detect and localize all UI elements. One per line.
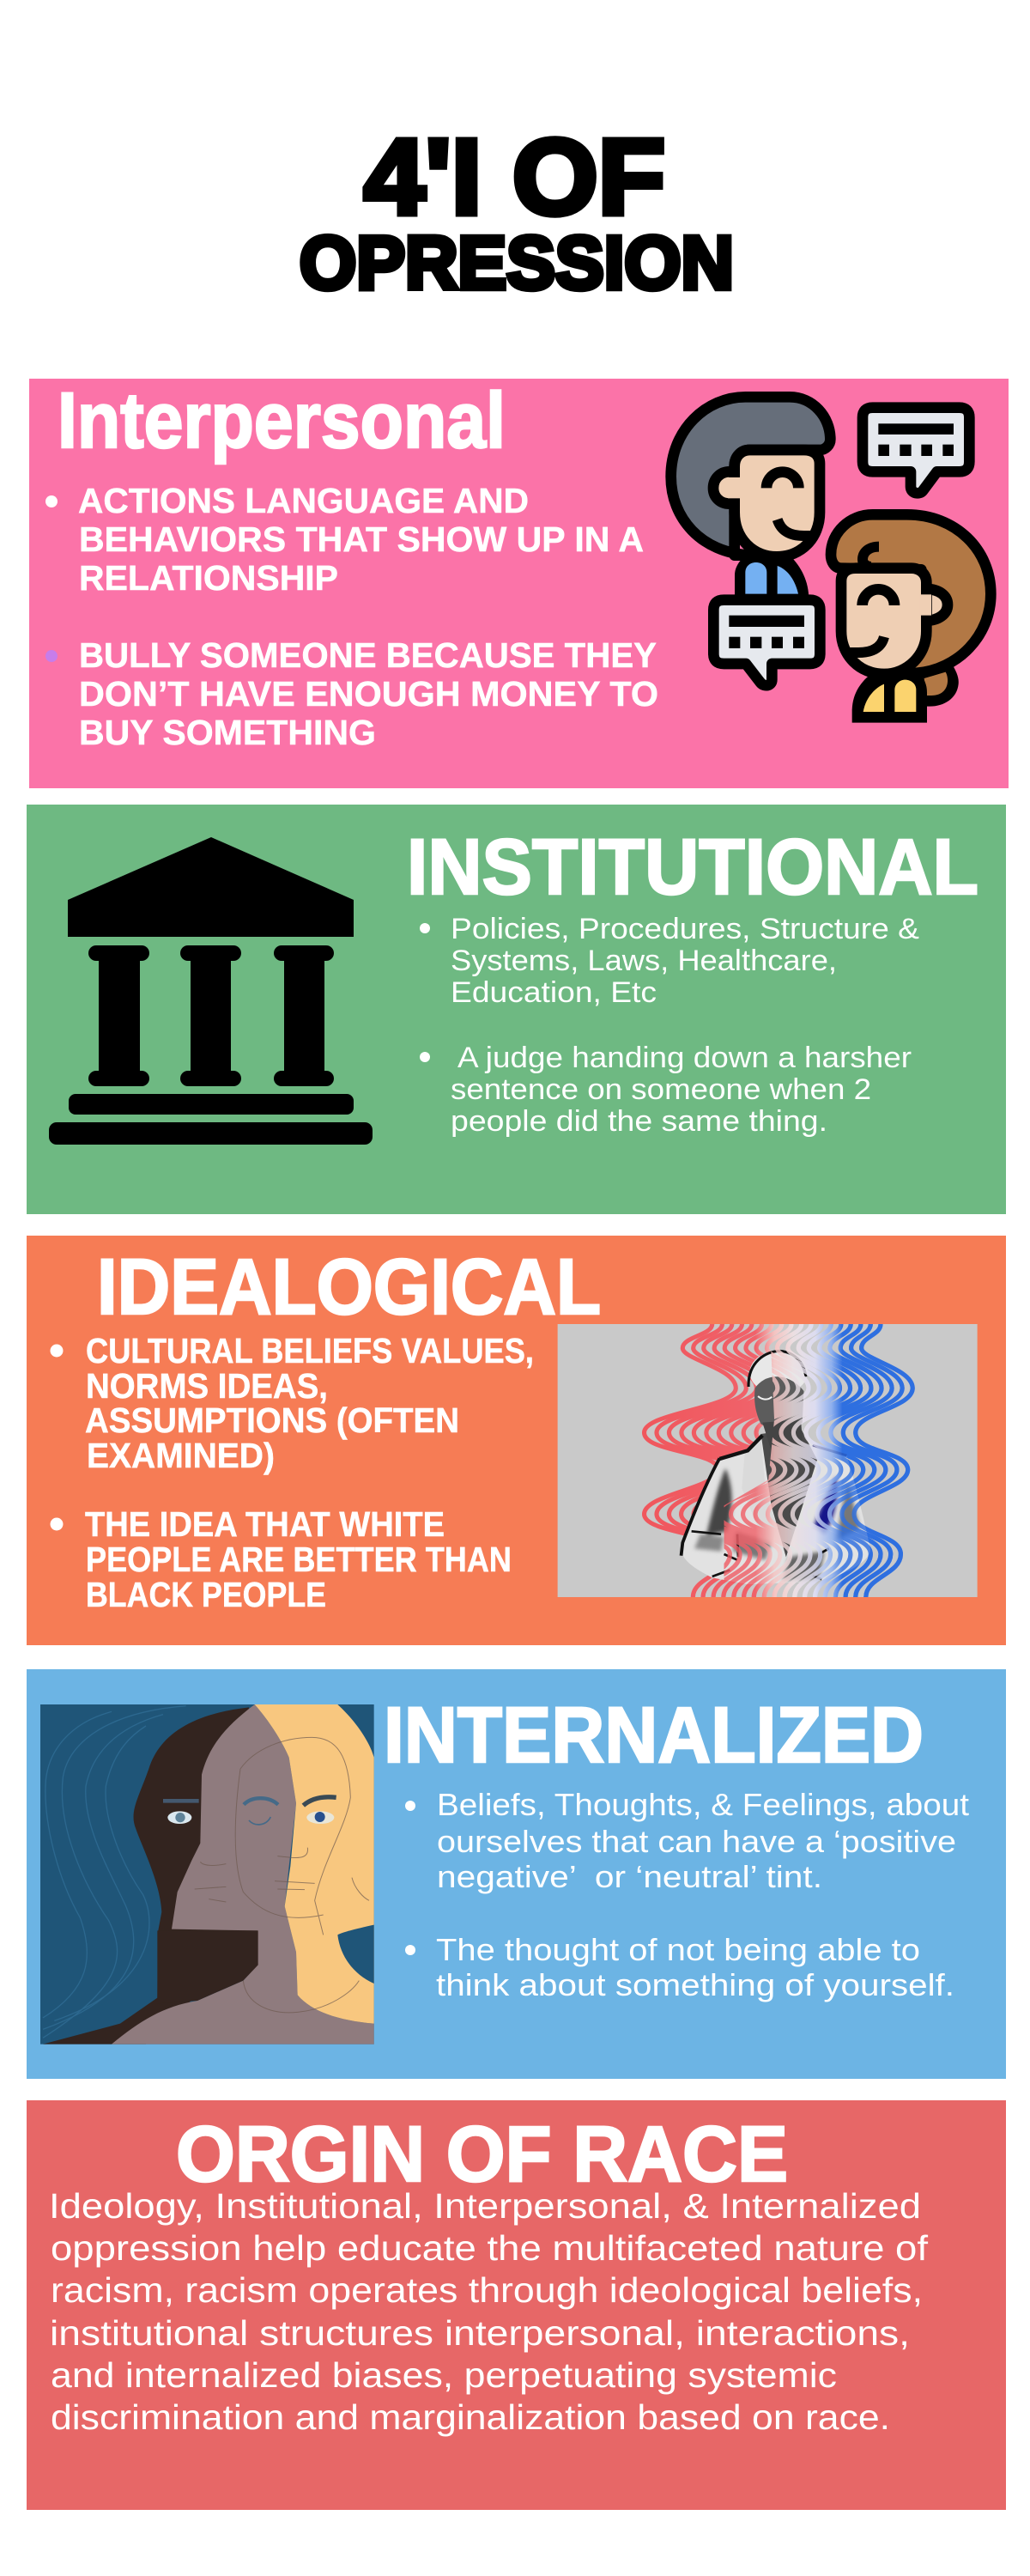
body paragraph: institutional structures interpersonal, interactions,	[50, 2313, 910, 2353]
panel: orgin of race	[27, 2100, 1006, 2510]
bullet list: institutional: Policies, Procedures, Structure &	[451, 913, 919, 945]
panel: internalized	[27, 1669, 1006, 2079]
body paragraph: discrimination and marginalization based on race.	[51, 2397, 890, 2437]
heading: idealogical: IDEALOGICAL	[97, 1243, 601, 1331]
title: OPRESSION	[300, 222, 734, 305]
bullet list: interpersonal: BEHAVIORS THAT SHOW UP IN A	[79, 519, 644, 559]
bullet list: institutional: sentence on someone when 2	[451, 1073, 871, 1106]
icon: institution building	[49, 837, 373, 1145]
illustration: three-tone face	[40, 1704, 374, 2044]
bullet list: institutional: A judge handing down a harsher	[457, 1042, 912, 1074]
title	[300, 118, 734, 305]
heading: internalized: INTERNALIZED	[384, 1692, 924, 1779]
bullet list: idealogical	[50, 1331, 534, 1614]
bullet list: internalized	[405, 1787, 969, 2002]
bullet list: internalized: think about something of yourself.	[436, 1967, 954, 2002]
bullet list: institutional	[420, 913, 919, 1138]
icon: speech bubble top right	[863, 408, 969, 493]
body paragraph	[49, 2186, 929, 2437]
panel: idealogical	[27, 1236, 1006, 1645]
bullet list: idealogical: EXAMINED)	[87, 1436, 275, 1475]
bullet list: interpersonal: RELATIONSHIP	[79, 558, 338, 598]
bullet list: institutional: people did the same thing.	[451, 1105, 827, 1138]
icon: man with grey hair	[671, 397, 830, 599]
body paragraph: oppression help educate the multifaceted nature of	[51, 2228, 929, 2268]
bullet list: idealogical: PEOPLE ARE BETTER THAN	[86, 1540, 512, 1579]
bullet list: internalized: Beliefs, Thoughts, & Feelings, about	[437, 1787, 969, 1822]
icon: woman with brown hair	[831, 514, 991, 723]
icon: two people talking	[671, 397, 991, 723]
bullet list: internalized: ourselves that can have a ‘positive	[437, 1824, 956, 1859]
bullet list: idealogical: CULTURAL BELIEFS VALUES,	[86, 1331, 534, 1370]
heading: orgin of race: ORGIN OF RACE	[176, 2111, 788, 2198]
bullet list: idealogical: NORMS IDEAS,	[86, 1366, 328, 1406]
bullet list: interpersonal: BULLY SOMEONE BECAUSE THEY	[79, 635, 657, 675]
heading: interpersonal: Interpersonal	[58, 377, 506, 465]
heading: institutional: INSTITUTIONAL	[407, 823, 978, 911]
bullet list: internalized: The thought of not being able to	[436, 1932, 920, 1967]
figure: woman in blazer	[682, 1351, 870, 1584]
bullet list: interpersonal	[45, 481, 658, 752]
body paragraph: and internalized biases, perpetuating systemic	[51, 2355, 837, 2395]
illustration: woman with red and blue waves	[558, 1324, 978, 1597]
bullet list: interpersonal: BUY SOMETHING	[79, 713, 376, 752]
bullet list: institutional: Education, Etc	[451, 976, 657, 1009]
bullet list: idealogical: ASSUMPTIONS (OFTEN	[85, 1400, 459, 1440]
bullet list: institutional: Systems, Laws, Healthcare,	[451, 945, 837, 977]
icon: speech bubble bottom left	[713, 600, 820, 685]
title: 4'I OF	[364, 118, 665, 237]
bullet list: interpersonal: DON’T HAVE ENOUGH MONEY TO	[79, 674, 658, 714]
bullet list: interpersonal: ACTIONS LANGUAGE AND	[78, 481, 529, 520]
body paragraph: racism, racism operates through ideological beliefs,	[51, 2270, 923, 2310]
bullet list: idealogical: THE IDEA THAT WHITE	[85, 1504, 445, 1544]
body paragraph: Ideology, Institutional, Interpersonal, & Internalized	[49, 2186, 921, 2226]
panel: institutional	[27, 805, 1006, 1214]
panel: interpersonal	[29, 377, 1009, 788]
bullet list: internalized: negative’ or ‘neutral’ tint.	[437, 1859, 822, 1894]
wave lines over figure	[724, 1324, 915, 1597]
bullet list: idealogical: BLACK PEOPLE	[86, 1575, 326, 1614]
